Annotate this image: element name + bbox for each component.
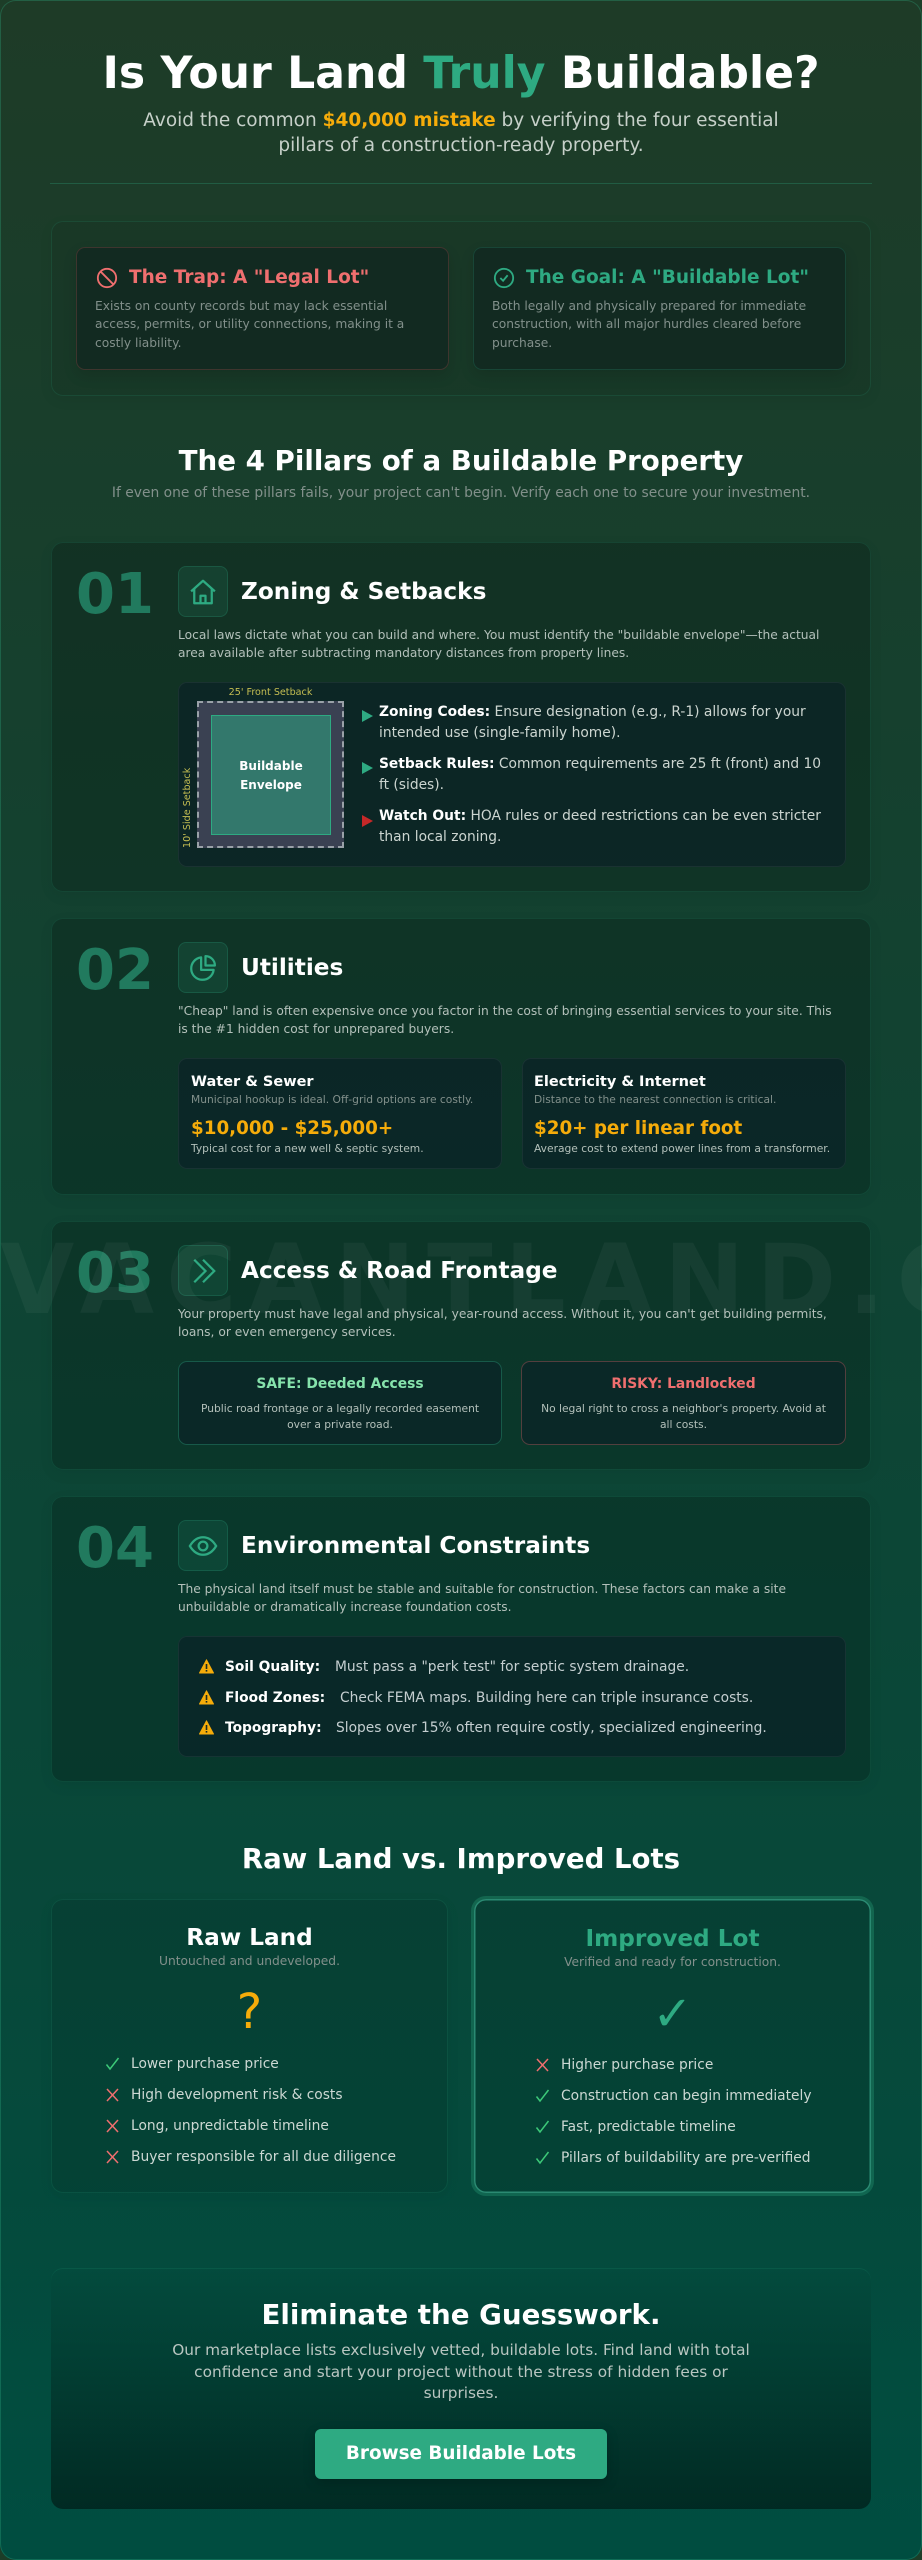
pillar description: is the #1 hidden cost for unprepared buyers. [178,1022,454,1036]
cost figure: $10,000 - $25,000+ [191,1118,393,1139]
detail box [178,682,846,867]
list item setback rules [379,756,821,793]
icon: chevrons [178,1245,228,1296]
icon: check mark: ✓ [652,1986,693,2042]
pillar description [178,1582,786,1614]
pillar description [178,628,819,660]
arrow green [362,762,373,774]
pillar heading: Zoning & Setbacks [241,578,486,605]
list item zoning codes [379,704,806,741]
title: Is Your Land Truly Buildable? [102,48,820,99]
item: Buyer responsible for all due diligence [131,2149,396,2165]
card text: access, permits, or utility connections, making it a [95,317,404,331]
pillar description: "Cheap" land is often expensive once you factor in the cost of bringing essential services to your site. This [178,1004,832,1018]
section heading: pillars: The 4 Pillars of a Buildable Property [179,444,743,477]
feature list [536,2057,812,2166]
list item setback rules: ft (sides). [379,777,444,793]
item: Higher purchase price [561,2057,713,2073]
card heading: Electricity & Internet [534,1074,706,1090]
cta heading: Eliminate the Guesswork. [261,2298,660,2331]
panel: pillar 01 zoning [51,542,871,892]
constraints list box [178,1636,846,1757]
subtitle: pillars of a construction-ready property. [278,135,644,156]
panel: pillar 04 environmental [51,1496,871,1782]
subtitle [143,110,779,156]
card heading: Water & Sewer [191,1074,314,1090]
cta text: Our marketplace lists exclusively vetted, buildable lots. Find land with total [172,2341,750,2359]
panel: raw land [51,1899,448,2193]
icon: ban [96,268,118,288]
cost card electricity and internet [522,1058,846,1169]
card heading: The Goal: A "Buildable Lot" [526,267,809,288]
buildable envelope: Buildable [239,759,303,773]
card heading: The Trap: A "Legal Lot" [129,267,369,288]
cta button [315,2429,607,2479]
pillar heading: Access & Road Frontage [241,1257,558,1284]
card subheading: Verified and ready for construction. [564,1955,781,1969]
card text: costly liability. [95,336,181,350]
arrow red [362,815,373,827]
list item setback rules: Setback Rules: Common requirements are 25 ft (front) and 10 [379,756,821,772]
side setback label: 10' Side Setback [182,768,193,848]
list item watch out: than local zoning. [379,829,501,845]
list item zoning codes: Zoning Codes: Ensure designation (e.g., R-1) allows for your [379,704,806,720]
divider line [50,183,872,184]
arrow green [362,710,373,722]
card text: Both legally and physically prepared for immediate [492,299,806,313]
card text: construction, with all major hurdles cleared before [492,317,801,331]
card text [492,299,806,350]
card: the trap [76,247,449,370]
pillar description: Your property must have legal and physical, year-round access. Without it, you can't get building permits, [178,1307,827,1321]
icon: check circle [494,268,514,288]
icon: question mark: ? [237,1984,262,2040]
cta button: Browse Buildable Lots [346,2443,576,2464]
card heading: Improved Lot [585,1925,760,1952]
buildable envelope: Envelope [240,778,302,792]
pillar description: Local laws dictate what you can build and where. You must identify the "buildable envelope"—the actual [178,628,819,642]
number 04: 04 [76,1516,154,1581]
card text: Exists on county records but may lack essential [95,299,387,313]
cta text: surprises. [424,2384,498,2402]
setback diagram [182,687,344,848]
cost figure: $20+ per linear foot [534,1118,742,1139]
pillar description [178,1307,827,1339]
number 01: 01 [76,562,154,627]
card text: Public road frontage or a legally recorded easement [201,1402,479,1415]
list item zoning codes: intended use (single-family home). [379,725,620,741]
row topography: Slopes over 15% often require costly, specialized engineering. [336,1720,767,1736]
card text: purchase. [492,336,552,350]
cost card water and sewer [178,1058,502,1169]
list item watch out [379,808,821,845]
card note: Municipal hookup is ideal. Off-grid options are costly. [191,1093,473,1106]
section subheading: If even one of these pillars fails, your project can't begin. Verify each one to secure your investment. [112,485,810,501]
card heading: RISKY: Landlocked [611,1376,756,1392]
number 02: 02 [76,938,154,1003]
panel: improved lot [474,1899,871,2193]
icon: house [178,566,228,617]
pillar heading: Utilities [241,954,343,981]
item: High development risk & costs [131,2087,343,2103]
item: Construction can begin immediately [561,2088,812,2104]
icon: eye [178,1520,228,1571]
pillar description: The physical land itself must be stable and suitable for construction. These factors can make a site [178,1582,786,1596]
icon: pie chart [178,942,228,993]
cta text [172,2341,750,2402]
item: Pillars of buildability are pre-verified [561,2150,811,2166]
item: Long, unpredictable timeline [131,2118,329,2134]
panel: pillar 02 utilities [51,918,871,1195]
cta text: confidence and start your project without the stress of hidden fees or [194,2363,728,2381]
number 03: 03 [76,1241,154,1306]
section heading: comparison: Raw Land vs. Improved Lots [242,1842,680,1875]
cost caption: Typical cost for a new well & septic system. [191,1142,424,1155]
pillar description: unbuildable or dramatically increase foundation costs. [178,1600,512,1614]
row soil quality: Soil Quality: [225,1659,320,1675]
card text [541,1402,826,1430]
panel: trap vs goal [51,221,871,396]
item: Lower purchase price [131,2056,279,2072]
cost caption: Average cost to extend power lines from a transformer. [534,1142,830,1155]
row topography: Topography: [225,1720,322,1736]
row soil quality: Must pass a "perk test" for septic system drainage. [335,1659,689,1675]
row flood zones: Check FEMA maps. Building here can triple insurance costs. [340,1690,753,1706]
list item watch out: Watch Out: HOA rules or deed restrictions can be even stricter [379,808,821,824]
card text [95,299,404,350]
card: the goal [473,247,846,370]
panel: pillar 03 access [51,1221,871,1470]
card heading: SAFE: Deeded Access [256,1376,424,1392]
card risky [521,1361,846,1445]
card note: Distance to the nearest connection is critical. [534,1093,776,1106]
pillar description [178,1004,832,1036]
card text [201,1402,479,1430]
card text: over a private road. [287,1418,393,1430]
pillar description: area available after subtracting mandatory distances from property lines. [178,646,629,660]
card text: all costs. [660,1418,707,1430]
panel: call to action [51,2268,871,2509]
pillar description: loans, or even emergency services. [178,1325,396,1339]
subtitle: Avoid the common $40,000 mistake by verifying the four essential [143,110,779,131]
item: Fast, predictable timeline [561,2119,736,2135]
pillar heading: Environmental Constraints [241,1532,590,1559]
front setback label: 25' Front Setback [229,687,312,698]
card subheading: Untouched and undeveloped. [159,1954,340,1968]
card heading: Raw Land [186,1924,313,1951]
card safe [178,1361,502,1445]
row flood zones: Flood Zones: [225,1690,325,1706]
property lot [197,701,344,848]
buildable envelope [211,715,331,835]
card text: No legal right to cross a neighbor's property. Avoid at [541,1402,826,1415]
feature list [106,2056,396,2165]
